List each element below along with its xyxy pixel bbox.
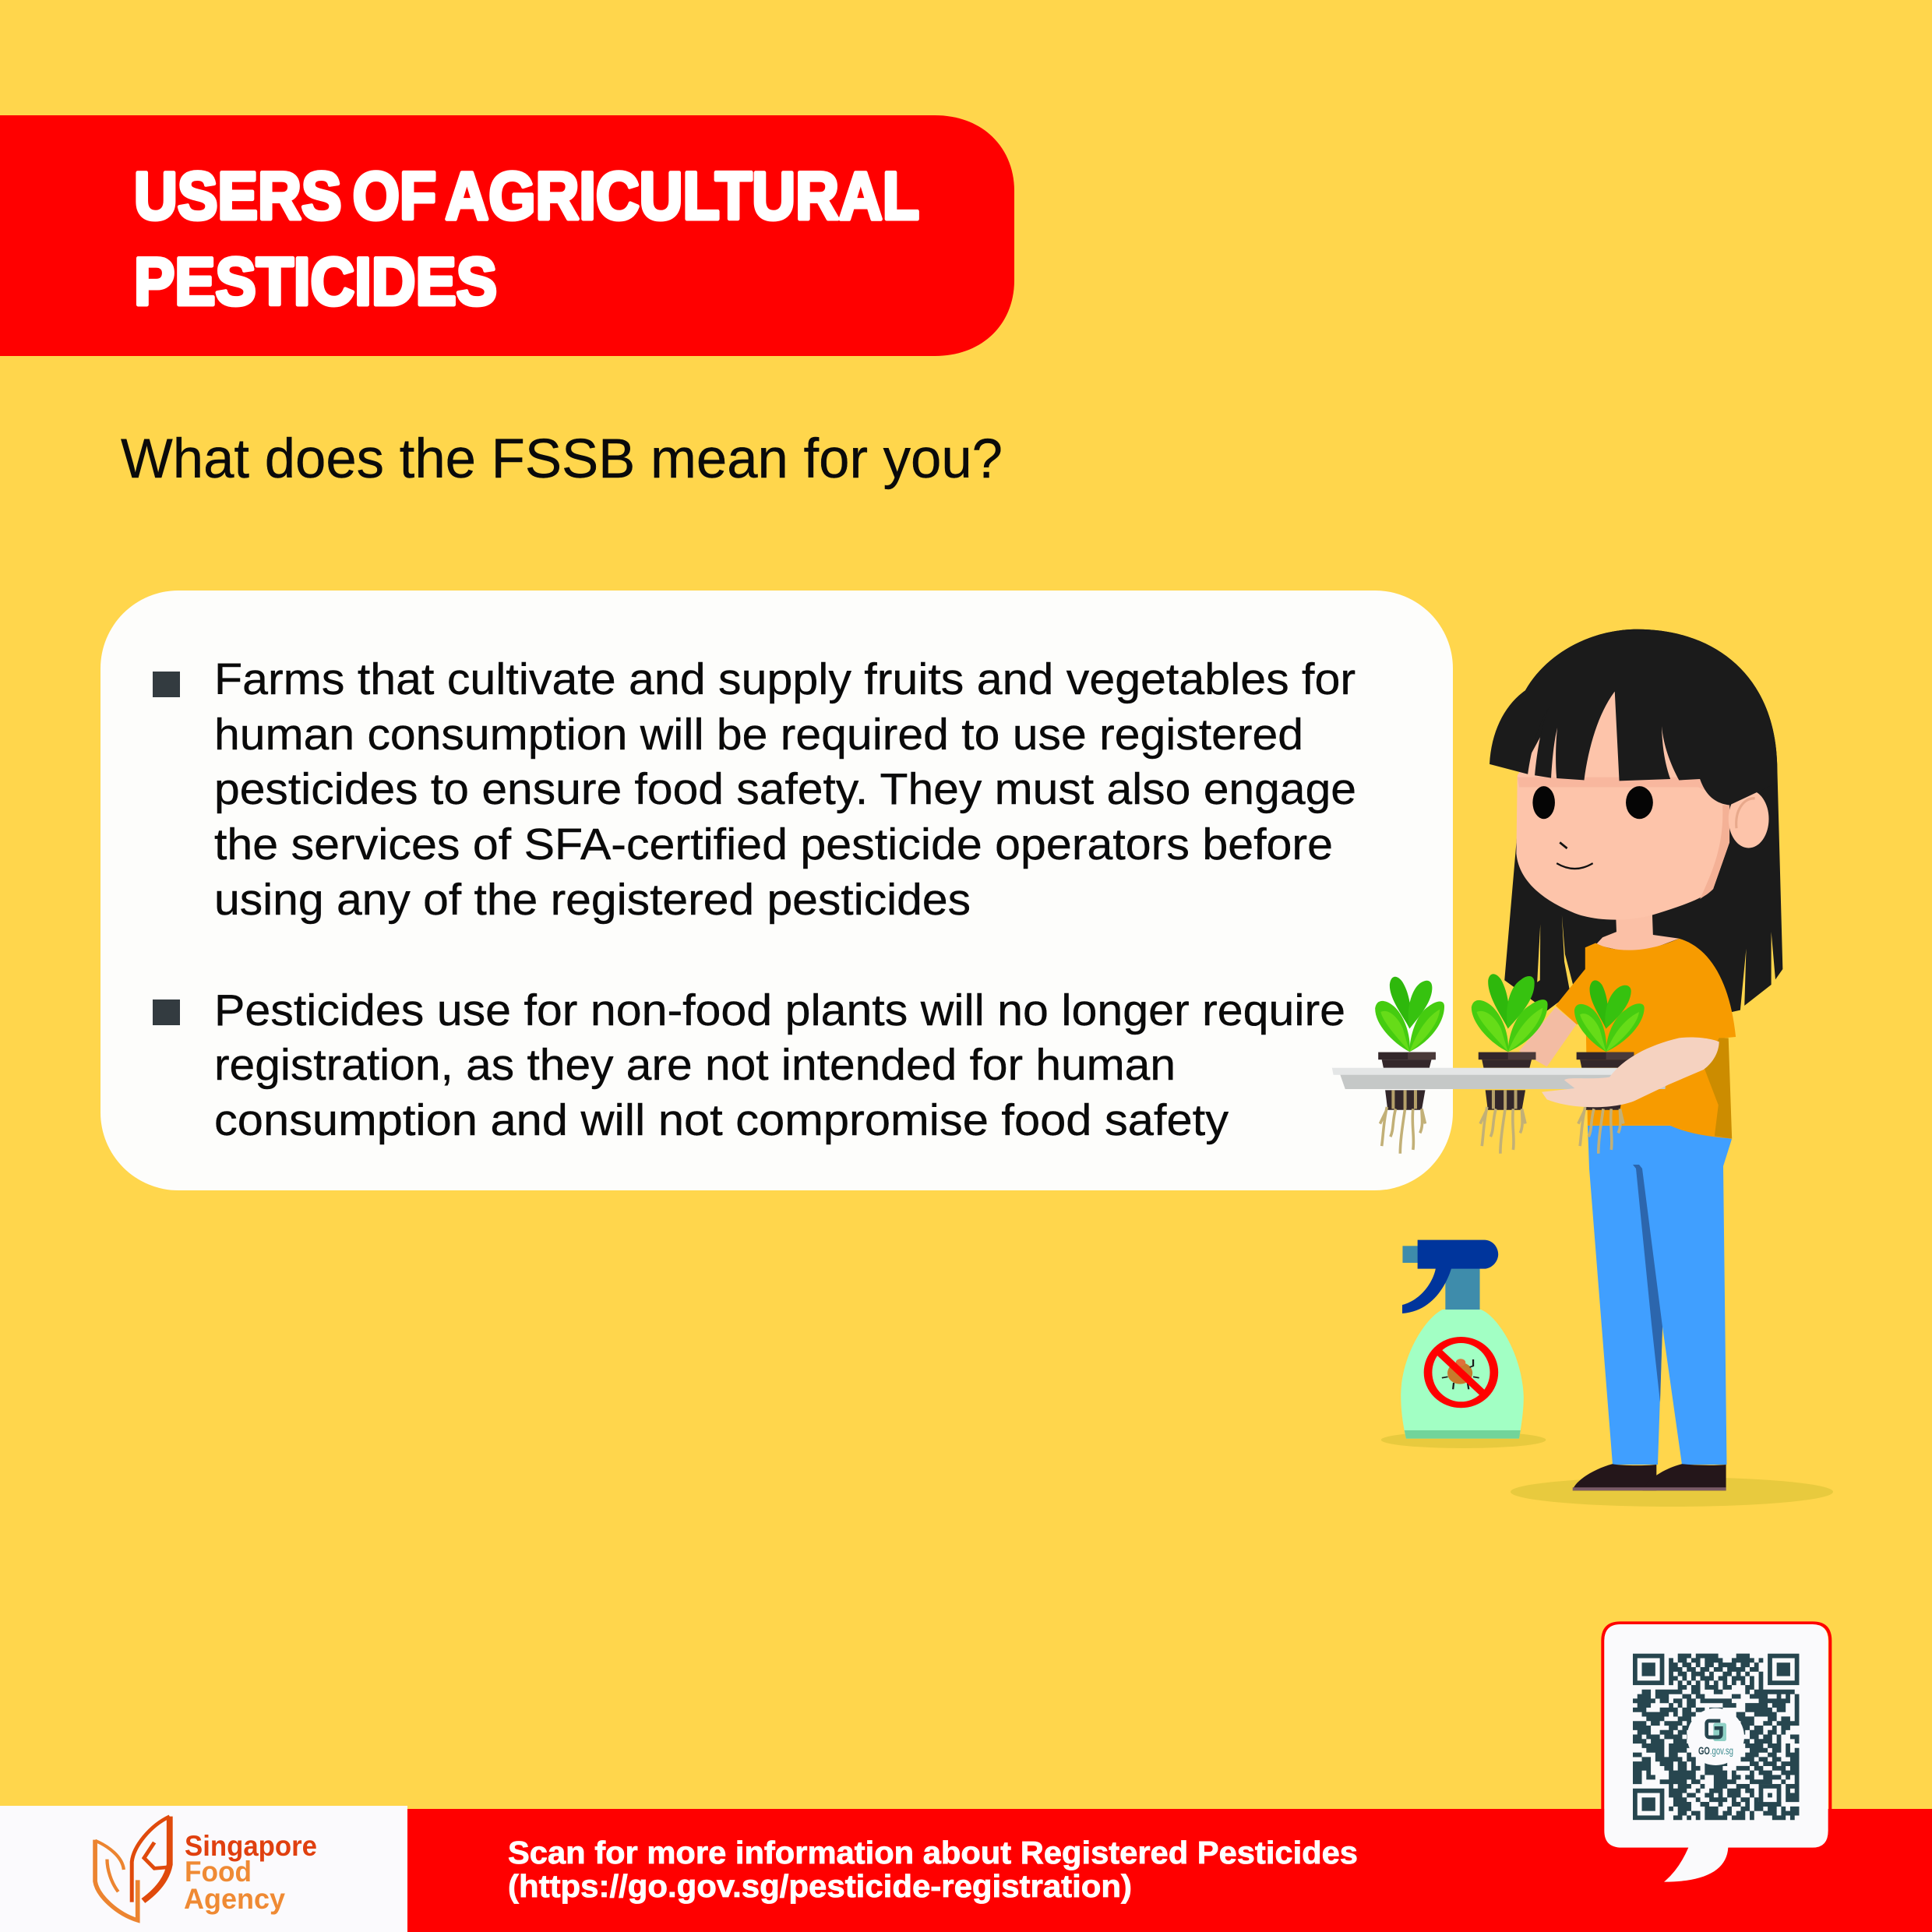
bullet square two [153,999,180,1025]
text block: farms: the services of SFA-certified pesticide operators before [214,820,1333,869]
upper body, face and hair [1490,629,1777,1139]
logo wordmark: Singapore [185,1830,317,1862]
logo wordmark: Agency [184,1883,285,1915]
title text [134,159,919,319]
GO.gov.sg badge [1687,1708,1744,1765]
finder centres [1642,1662,1790,1811]
illustration: potted plants on tray [1332,974,1719,1154]
icon: prohibition sign [1428,1340,1494,1405]
alignment pattern [1759,1784,1781,1807]
text block: farms: human consumption will be required to use registered [214,710,1303,760]
plant one [1375,977,1444,1154]
GO.gov.sg badge: GO.gov.sg [1698,1744,1733,1757]
nozzle tip [1402,1246,1419,1263]
shoes [1573,1464,1726,1490]
illustration: girl holding tray [1490,629,1782,1490]
text block: farms: pesticides to ensure food safety. They must also engage [214,764,1356,814]
spray trigger [1402,1240,1498,1313]
plant three [1574,980,1645,1154]
icon: bug [1442,1359,1479,1389]
logo wordmark: Food [185,1856,252,1888]
title text: PESTICIDES [134,245,497,319]
text block: farms: using any of the registered pesticides [214,875,971,925]
logo wordmark [184,1830,317,1915]
text block: non-food plants: registration, as they are not intended for human [214,1040,1176,1090]
bottle neck and nozzle [1445,1268,1480,1310]
footer call to action text: (https://go.gov.sg/pesticide-registration) [508,1868,1132,1904]
finder patterns [1635,1656,1797,1817]
illustration: figure shadow [1511,1477,1833,1507]
footer call to action text: Scan for more information about Registered Pesticides [508,1835,1358,1870]
footer red band [407,1809,1932,1932]
bottle shadow [1381,1432,1546,1448]
back hair [1504,629,1782,1017]
data modules [1633,1656,1799,1817]
footer call to action text [508,1835,1358,1904]
footer logo panel [0,1806,407,1932]
icon: leaf logo [95,1817,170,1920]
tray [1332,1068,1667,1089]
near arm and hand [1542,1037,1719,1107]
bullet square one [153,672,180,697]
panel: explanation card [100,591,1453,1190]
title banner [0,115,1014,356]
text block: farms [214,654,1356,925]
text block: farms: Farms that cultivate and supply fruits and vegetables for [214,654,1356,704]
bottle base [1405,1430,1521,1439]
bubble shape [1602,1623,1830,1882]
plant two [1472,974,1548,1154]
bottle body [1401,1310,1524,1439]
title text: USERS OF AGRICULTURAL [134,159,919,234]
QR code speech bubble [1602,1623,1830,1882]
QR code [1633,1656,1799,1817]
text block: non-food plants: consumption and will not compromise food safety [214,1095,1229,1145]
trousers [1588,1126,1732,1465]
text block: non-food plants [214,985,1345,1145]
subtitle question: What does the FSSB mean for you? [121,428,1003,490]
illustration: spray bottle [1381,1240,1546,1448]
text block: non-food plants: Pesticides use for non-food plants will no longer require [214,985,1345,1035]
